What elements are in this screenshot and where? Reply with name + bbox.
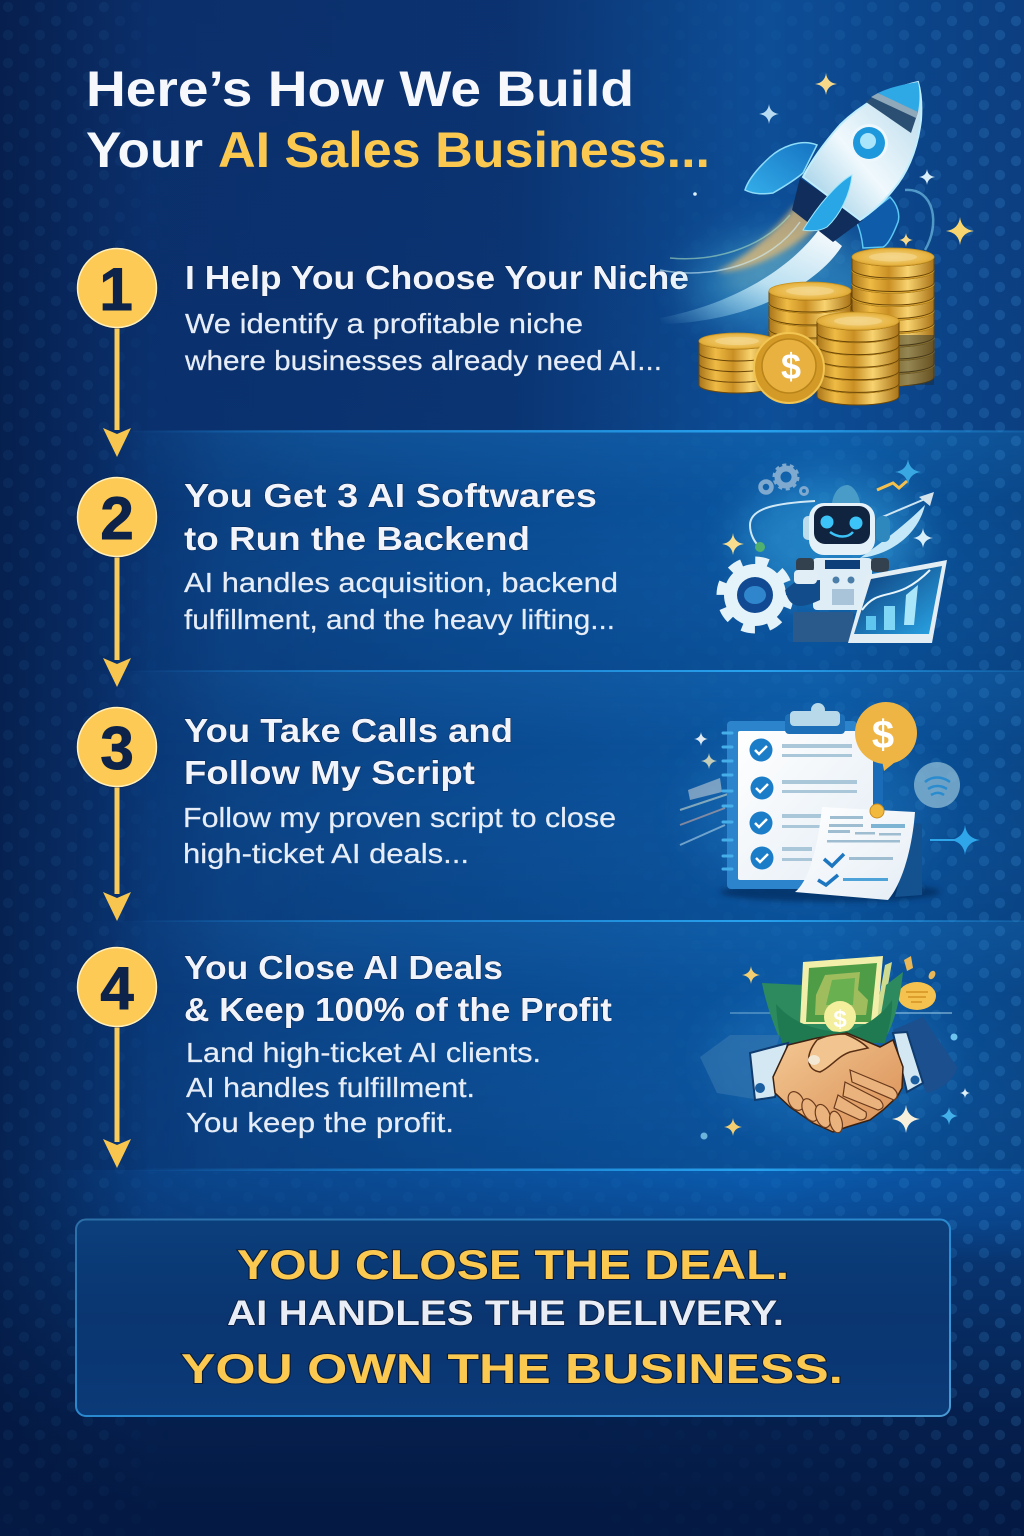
step 2 arrow <box>103 556 131 687</box>
robot legs <box>793 612 853 642</box>
step 4 body: You keep the profit. <box>186 1107 454 1138</box>
coin stack front <box>817 312 899 405</box>
dollar bubble <box>855 702 917 771</box>
step 4 heading: You Close AI Deals <box>184 949 503 986</box>
rocket porthole <box>850 124 888 162</box>
step 3 number badge: 3 <box>100 715 134 782</box>
pin <box>870 804 884 818</box>
money bills back <box>875 962 892 1020</box>
coin stack left <box>699 333 775 393</box>
step 3 arrow <box>103 786 131 921</box>
icon: rocket and coins <box>660 73 974 405</box>
motion streaks <box>680 778 728 845</box>
dollar coin <box>754 333 824 403</box>
step 2 body <box>184 567 618 635</box>
clasped hands <box>773 1033 903 1134</box>
sparkles <box>694 732 980 855</box>
step 2 heading <box>184 477 597 557</box>
folder right <box>895 823 922 897</box>
small gears <box>760 465 808 494</box>
step 4 heading: & Keep 100% of the Profit <box>184 991 612 1028</box>
step 2 <box>76 476 618 687</box>
step 1 number badge <box>76 247 158 329</box>
swoosh arrow <box>860 492 934 558</box>
step 3 body: Follow my proven script to close <box>183 802 616 833</box>
rocket centre fin <box>803 175 852 231</box>
banknote: $ <box>833 1006 847 1033</box>
step 2 number badge <box>76 476 158 558</box>
robot antenna <box>832 485 860 503</box>
step 2 number badge: 2 <box>100 485 134 552</box>
rocket nose <box>878 82 920 112</box>
banknote <box>800 956 883 1033</box>
step 3 heading: Follow My Script <box>184 754 475 791</box>
step 4 body: AI handles fulfillment. <box>186 1072 475 1103</box>
step 3 body: high-ticket AI deals... <box>183 838 469 869</box>
step 1 heading: I Help You Choose Your Niche <box>185 259 689 296</box>
money bag back <box>762 972 903 1035</box>
coin stack middle <box>769 282 851 351</box>
step 1 body <box>184 308 662 376</box>
step 4 <box>76 946 612 1168</box>
step 1 <box>76 247 689 457</box>
floating accents <box>730 956 952 1013</box>
rocket band <box>866 93 918 133</box>
left cuff <box>750 1043 788 1100</box>
speech bubble <box>914 762 960 808</box>
clipboard paper <box>738 731 875 880</box>
step 4 number badge: 4 <box>100 955 134 1022</box>
dollar coin: $ <box>781 346 801 387</box>
sparkles <box>700 966 970 1140</box>
big gear <box>721 561 789 629</box>
rocket exhaust trail <box>660 190 933 335</box>
step 1 number badge: 1 <box>99 256 133 323</box>
step 2 body: AI handles acquisition, backend <box>184 567 618 598</box>
callout line 3: YOU OWN THE BUSINESS. <box>181 1345 843 1392</box>
step 1 body: We identify a profitable niche <box>185 308 583 339</box>
gold squiggle <box>877 481 907 490</box>
callout line 1: YOU CLOSE THE DEAL. <box>237 1241 789 1288</box>
step 1 arrow <box>103 326 131 457</box>
title: AI Sales Business... <box>218 122 710 178</box>
callout panel <box>76 1220 950 1416</box>
title <box>86 61 710 178</box>
step 4 heading <box>184 949 612 1028</box>
rocket body <box>803 82 921 220</box>
step 3 body <box>183 802 616 869</box>
step 4 number badge <box>76 946 158 1028</box>
step 3 heading <box>184 712 513 791</box>
checklist items <box>750 738 857 870</box>
step 3 heading: You Take Calls and <box>184 712 513 749</box>
step 2 body: fulfillment, and the heavy lifting... <box>184 604 615 635</box>
step 2 heading: to Run the Backend <box>184 520 530 557</box>
faded left sleeve <box>700 1035 780 1100</box>
icon: handshake with money <box>700 956 970 1140</box>
sparkles <box>722 459 933 555</box>
step 4 arrow <box>103 1026 131 1168</box>
clipboard board <box>727 721 857 889</box>
step 1 body: where businesses already need AI... <box>184 345 662 376</box>
title: Your <box>86 122 203 178</box>
step 3 <box>76 706 616 921</box>
coin stack back <box>852 248 934 386</box>
stem <box>873 756 883 811</box>
tablet chart <box>848 560 947 643</box>
step 4 body <box>186 1037 541 1138</box>
rocket left fin <box>745 143 817 194</box>
right cuff <box>893 1032 923 1092</box>
robot fist <box>785 570 820 606</box>
sparkles <box>693 73 974 247</box>
robot head <box>803 503 890 555</box>
right sleeve <box>893 1017 957 1093</box>
note sheet <box>795 807 915 900</box>
clipboard clip <box>785 703 845 734</box>
connector curve <box>750 501 815 547</box>
dollar bubble: $ <box>872 713 894 757</box>
title: Here’s How We Build <box>86 61 634 117</box>
icon: robot with gear and chart <box>721 459 947 643</box>
step 2 heading: You Get 3 AI Softwares <box>184 477 597 514</box>
rocket right fin <box>857 197 899 248</box>
rocket engine <box>792 178 863 242</box>
step 3 number badge <box>76 706 158 788</box>
step 4 body: Land high-ticket AI clients. <box>186 1037 541 1068</box>
icon: clipboard with checklist <box>680 702 980 902</box>
callout line 2: AI HANDLES THE DELIVERY. <box>227 1294 784 1333</box>
binder rings <box>723 733 732 869</box>
robot body <box>796 558 889 610</box>
money bag front <box>776 1000 892 1043</box>
